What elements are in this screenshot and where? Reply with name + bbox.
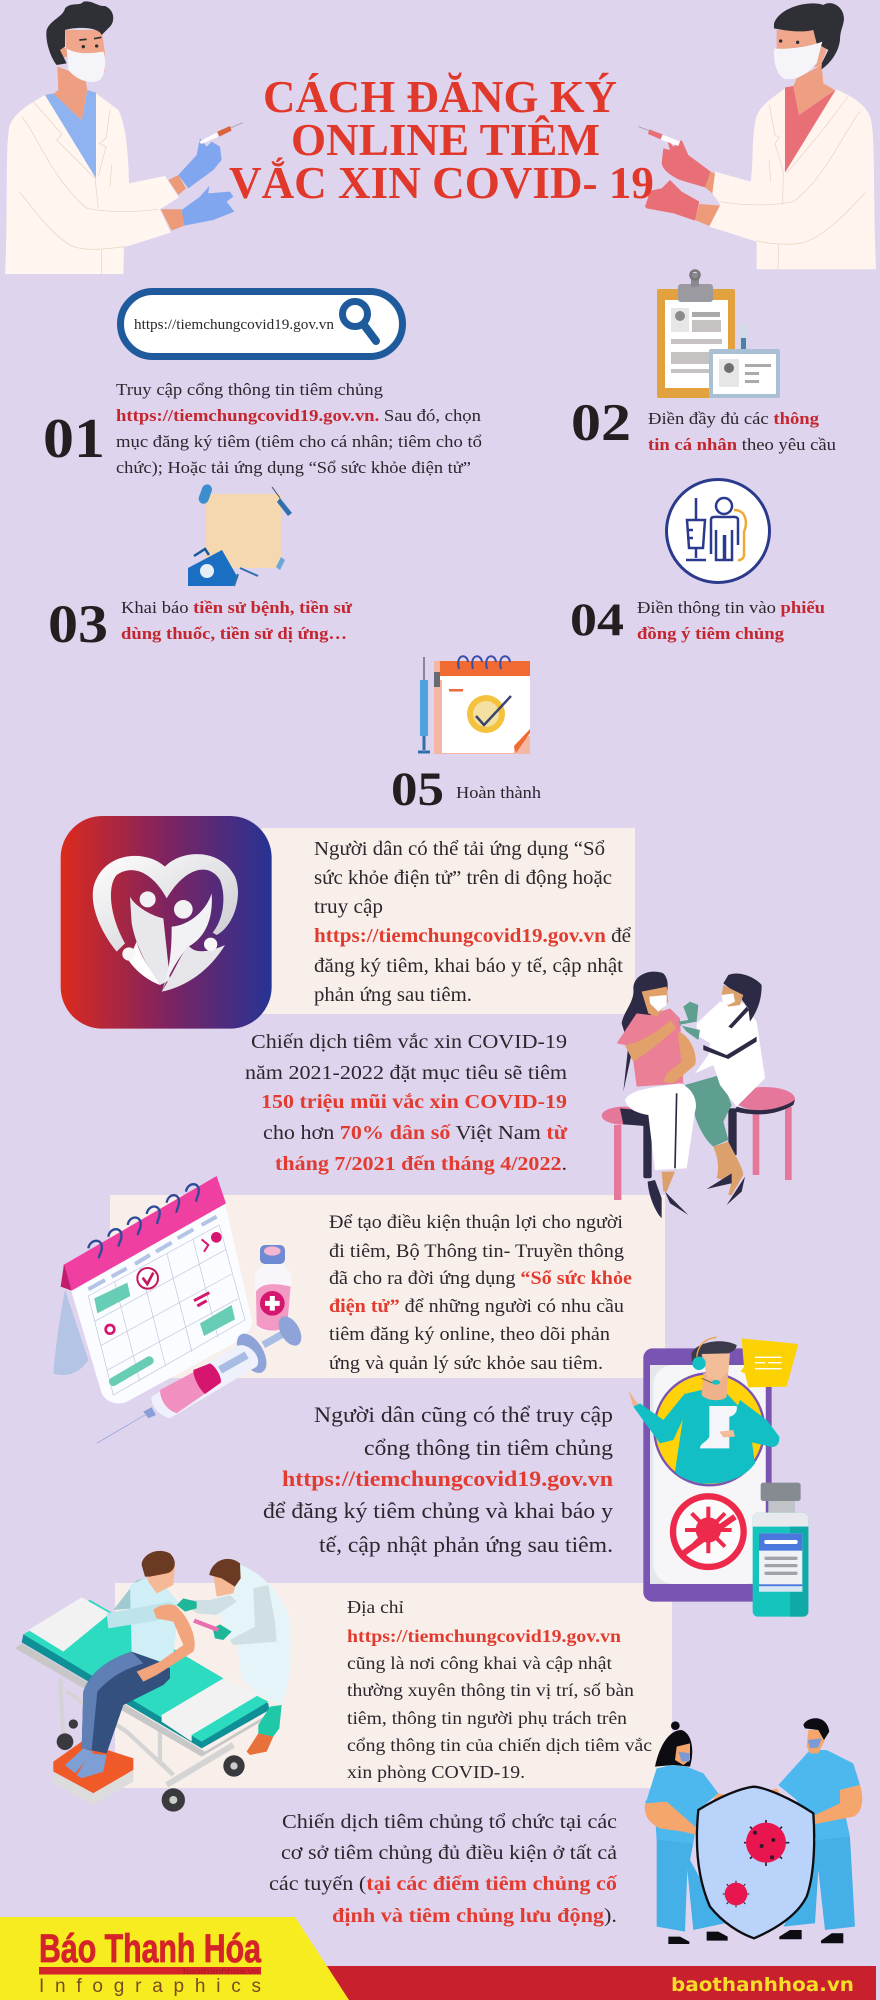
text block: vaccination sites: các tuyến ( tại các điểm tiêm chủng cố <box>269 1873 618 1895</box>
panel: portal address text: cổng thông tin của chiến dịch tiêm vắc <box>347 1735 652 1755</box>
step 02 text <box>648 409 837 454</box>
text block: campaign goal: cho hơn 70% dân số Việt Nam từ <box>263 1122 568 1144</box>
text block: campaign goal: tháng 7/2021 đến tháng 4/2022 . <box>275 1153 567 1175</box>
step 01 text <box>116 380 482 477</box>
step 03 text: Khai báo tiền sử bệnh, tiền sử <box>121 598 353 617</box>
panel: portal address text: Địa chỉ <box>347 1597 404 1617</box>
number 01: 01 <box>43 408 105 470</box>
text block: web portal access: tế, cập nhật phản ứng sau tiêm. <box>319 1532 613 1557</box>
panel: app creation text: đã cho ra đời ứng dụng “Sổ sức khỏe <box>329 1269 632 1289</box>
panel: app creation text <box>329 1213 632 1374</box>
text block: web portal access <box>263 1402 613 1557</box>
title: ONLINE TIÊM <box>291 114 600 165</box>
panel: app info background <box>262 828 635 1014</box>
step 01 text: chức); Hoặc tải ứng dụng “Sổ sức khỏe điện tử” <box>116 458 471 477</box>
text block: web portal access: https://tiemchungcovid19.gov.vn <box>282 1466 613 1491</box>
illustration: medical staff holding shield against virus <box>645 1718 862 1944</box>
panel: app description text: sức khỏe điện tử” trên di động hoặc <box>314 868 612 889</box>
panel: portal address text: xin phòng COVID-19. <box>347 1762 525 1782</box>
panel: portal address text: cũng là nơi công khai và cập nhật <box>347 1653 612 1673</box>
panel: app creation text: ứng và quản lý sức khỏe sau tiêm. <box>329 1354 603 1374</box>
panel: app creation text: điện tử” để những người có nhu cầu <box>329 1297 624 1317</box>
step 01 text: https://tiemchungcovid19.gov.vn. Sau đó, chọn <box>116 406 482 425</box>
panel: app description text <box>314 839 631 1006</box>
search bar: https://tiemchungcovid19.gov.vn <box>134 317 335 333</box>
footer red band <box>300 1966 876 2000</box>
step 04 text: Điền thông tin vào phiếu <box>637 598 825 617</box>
panel: app description text: đăng ký tiêm, khai báo y tế, cập nhật <box>314 956 624 977</box>
panel: app description text: phản ứng sau tiêm. <box>314 985 472 1006</box>
step 04 text <box>637 598 825 643</box>
illustration: patient on bed being vaccinated <box>15 1551 291 1812</box>
panel: app description text: truy cập <box>314 897 383 918</box>
text block: campaign goal: năm 2021-2022 đặt mục tiêu sẽ tiêm <box>245 1062 567 1084</box>
text block: campaign goal: 150 triệu mũi vắc xin COVID-19 <box>261 1091 567 1113</box>
text block: vaccination sites: định và tiêm chủng lưu động ). <box>332 1905 617 1927</box>
number 05: 05 <box>391 763 444 816</box>
text block: web portal access: cổng thông tin tiêm chủng <box>364 1435 613 1460</box>
panel: app creation background <box>110 1195 665 1378</box>
number 02: 02 <box>571 394 631 452</box>
panel: app creation text: tiêm đăng ký online, theo dõi phản <box>329 1325 610 1345</box>
text block: web portal access: Người dân cũng có thể truy cập <box>314 1402 613 1427</box>
footer website: baothanhhoa.vn <box>671 1974 854 1996</box>
step 05 text: Hoàn thành <box>456 783 542 802</box>
step 01 text: mục đăng ký tiêm (tiêm cho cá nhân; tiêm cho tổ <box>116 432 482 451</box>
illustration: male doctor with syringe <box>5 1 243 274</box>
illustration: woman getting vaccinated <box>602 972 795 1218</box>
illustration: female doctor with syringe <box>638 3 876 269</box>
footer yellow logo block: Infographics <box>39 1976 261 1997</box>
text block: vaccination sites: cơ sở tiêm chủng đủ điều kiện ở tất cả <box>281 1842 617 1864</box>
step 03 text: dùng thuốc, tiền sử dị ứng… <box>121 624 347 643</box>
step 02 text: Điền đầy đủ các thông <box>648 409 820 428</box>
number 04: 04 <box>570 594 624 646</box>
panel: app creation text: đi tiêm, Bộ Thông tin- Truyền thông <box>329 1242 624 1262</box>
panel: portal address text <box>347 1597 652 1782</box>
panel: portal address text: https://tiemchungcovid19.gov.vn <box>347 1626 621 1646</box>
icon: beige note and medical kit <box>188 483 292 586</box>
title: CÁCH ĐĂNG KÝ <box>263 71 617 122</box>
illustration: phone with support agent, virus and vial <box>628 1337 808 1617</box>
panel: portal address background <box>115 1583 672 1788</box>
panel: app description text: https://tiemchungcovid19.gov.vn để <box>314 926 631 947</box>
footer yellow logo block: Báo Thanh Hóa <box>39 1927 262 1971</box>
step 03 text <box>121 598 353 643</box>
panel: portal address text: thường xuyên thông tin vị trí, số bàn <box>347 1680 634 1700</box>
title: VẮC XIN COVID- 19 <box>229 156 654 208</box>
icon: vaccinated person in circle <box>666 480 770 582</box>
step 02 text: tin cá nhân theo yêu cầu <box>648 435 837 454</box>
search bar <box>120 292 402 356</box>
icon: clipboard and ID badge <box>657 270 780 398</box>
footer yellow logo block: baothanhhoa.vn <box>183 1967 259 1976</box>
text block: campaign goal: Chiến dịch tiêm vắc xin COVID-19 <box>251 1031 567 1053</box>
text block: campaign goal <box>245 1031 568 1175</box>
step 04 text: đồng ý tiêm chủng <box>637 624 785 643</box>
number 03: 03 <box>48 594 108 654</box>
icon: health app logo <box>61 816 272 1029</box>
title <box>229 71 654 208</box>
icon: calendar with check and syringe <box>418 656 530 754</box>
step 01 text: Truy cập cổng thông tin tiêm chủng <box>116 380 384 399</box>
text block: vaccination sites: Chiến dịch tiêm chủng tổ chức tại các <box>282 1811 617 1833</box>
panel: app description text: Người dân có thể tải ứng dụng “Sổ <box>314 839 605 860</box>
illustration: calendar, vial and syringe <box>53 1176 306 1443</box>
footer yellow logo block <box>0 1917 349 2000</box>
text block: web portal access: để đăng ký tiêm chủng và khai báo y <box>263 1498 613 1523</box>
panel: portal address text: tiêm, thông tin người phụ trách trên <box>347 1708 627 1728</box>
text block: vaccination sites <box>269 1811 618 1927</box>
panel: app creation text: Để tạo điều kiện thuận lợi cho người <box>329 1213 623 1233</box>
